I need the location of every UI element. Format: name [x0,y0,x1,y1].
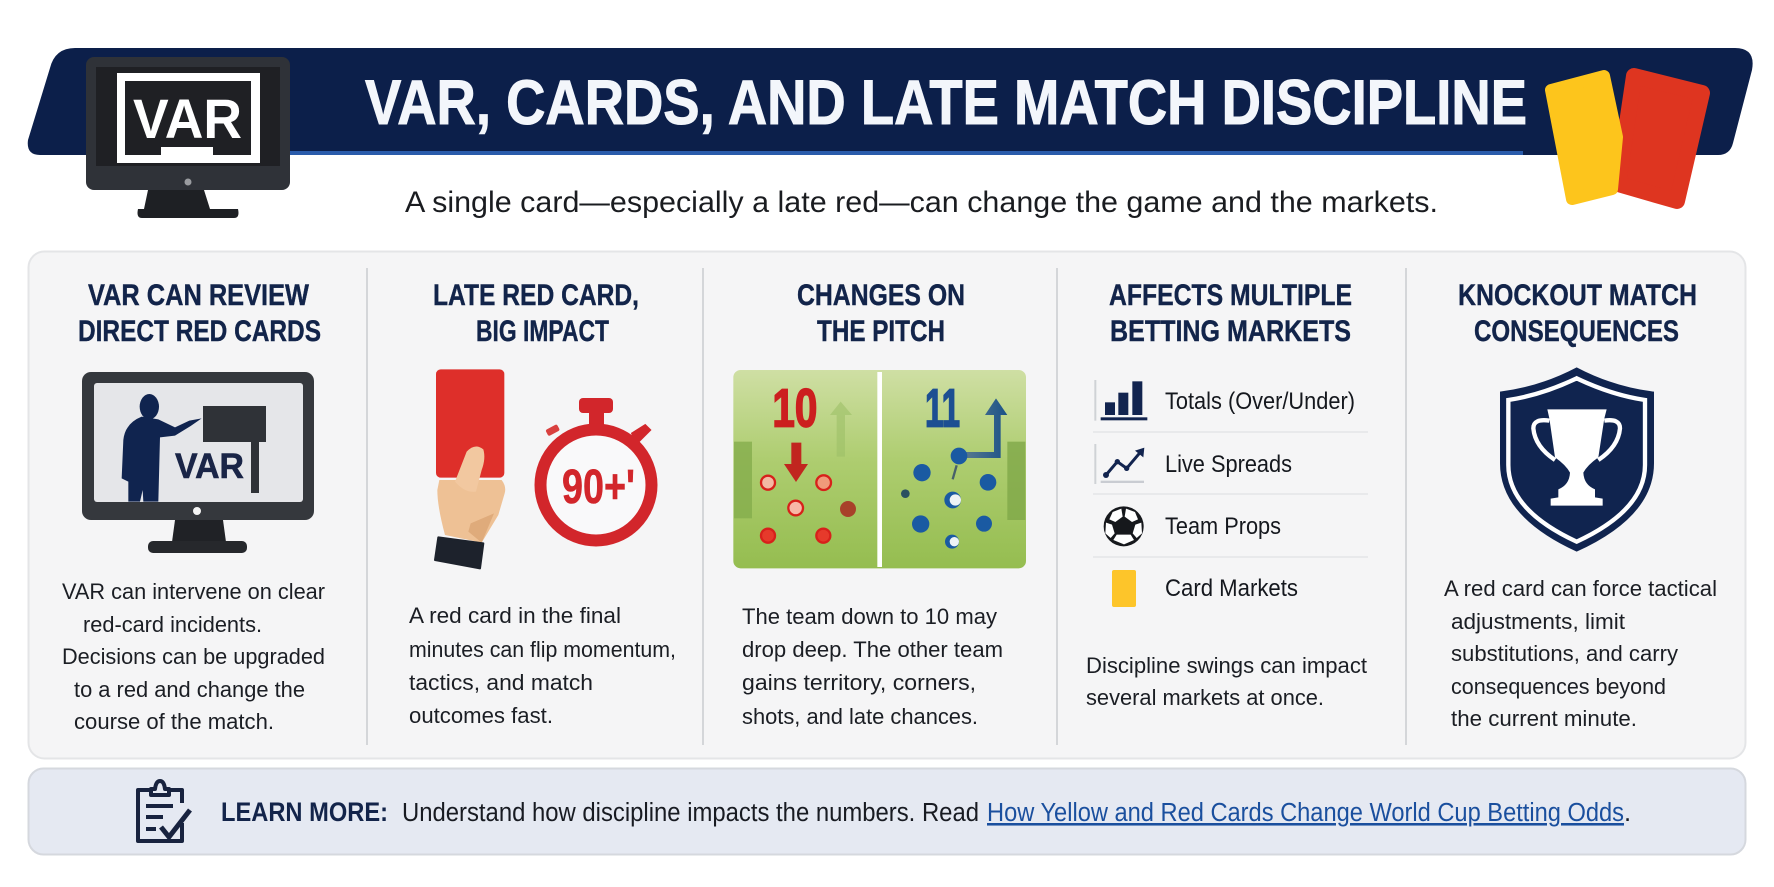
chart: pitch 10 vs 11 [733,370,1026,568]
text: pitch description: The team down to 10 may [742,604,998,629]
heading: late red card: BIG IMPACT [476,315,609,348]
title text: VAR, CARDS, AND LATE MATCH DISCIPLINE [365,68,1527,138]
title banner [28,48,1753,155]
heading: VAR can review [78,279,321,348]
text: knockout description: adjustments, limit [1451,609,1626,634]
item: team props: Team Props [1165,513,1281,540]
text: pitch description: shots, and late chances. [742,704,978,729]
text: late red description: outcomes fast. [409,703,553,728]
icon: yellow card [1112,570,1136,607]
heading: knockout consequences [1458,279,1697,348]
text: markets description: Discipline swings can impact [1086,653,1368,678]
item: card markets [1112,570,1298,607]
text: knockout description [1444,576,1717,731]
text: pitch description [742,604,1003,729]
icon: bar chart [1094,380,1147,421]
heading: changes on the pitch [797,279,965,348]
text: learn more: How Yellow and Red Cards Change World Cup Betting Odds [987,799,1624,827]
text: pitch description: gains territory, corners, [742,670,976,695]
panel: betting markets [1086,279,1368,710]
text: learn more: . [1624,799,1631,827]
chart: pitch 10 vs 11: 11 [925,380,960,439]
item: totals: Totals (Over/Under) [1165,388,1355,415]
heading: changes on the pitch: THE PITCH [817,315,945,348]
text: knockout description: the current minute. [1451,706,1637,731]
icon: stopwatch 90+: 90+' [562,461,635,514]
text: late red description: minutes can flip momentum, [409,637,676,662]
text: VAR description: VAR can intervene on clear [62,579,325,604]
text: knockout description: substitutions, and carry [1451,641,1679,666]
heading: VAR can review: DIRECT RED CARDS [78,315,321,348]
text: pitch description: drop deep. The other team [742,637,1003,662]
icon: monitor with referee [82,372,314,553]
heading: betting markets: BETTING MARKETS [1110,315,1351,348]
text: VAR description: Decisions can be upgraded [62,644,325,669]
icon: clipboard checklist [138,781,190,841]
text: markets description: several markets at once. [1086,685,1324,710]
heading: knockout consequences: KNOCKOUT MATCH [1458,279,1697,312]
icon: hand holding red card [435,369,505,568]
panel: VAR review [62,279,325,734]
text: learn more [221,797,1631,827]
text: knockout description: consequences beyond [1451,674,1666,699]
item: card markets: Card Markets [1165,575,1298,602]
heading: betting markets [1109,279,1352,348]
text: VAR description: to a red and change the [74,677,305,702]
icon: trend line [1094,444,1144,484]
text: VAR description: red-card incidents. [83,612,262,637]
text: VAR description [62,579,325,734]
icon: stopwatch 90+ [540,398,652,540]
panel: changes on the pitch [733,279,1026,729]
text: VAR description: course of the match. [74,709,274,734]
icon: shield with trophy [1500,367,1654,552]
panel: late red card [409,279,676,728]
heading: VAR can review: VAR CAN REVIEW [88,279,310,312]
heading: knockout consequences: CONSEQUENCES [1474,315,1679,348]
item: team props [1104,506,1281,546]
text: learn more: LEARN MORE: [221,797,388,827]
heading: late red card [433,279,639,348]
icon: VAR monitor: VAR [133,87,242,150]
heading: changes on the pitch: CHANGES ON [797,279,965,312]
icon: monitor with referee: VAR [175,447,244,486]
text: late red description: A red card in the final [409,603,621,628]
item: live spreads [1094,444,1292,484]
subtitle: A single card—especially a late red—can change the game and the markets. [405,186,1438,219]
chart: pitch 10 vs 11: 10 [772,380,817,439]
panel: knockout consequences [1444,279,1717,731]
text: markets description [1086,653,1368,710]
text: learn more: Understand how discipline impacts the numbers. Read [402,799,979,827]
icon: red and yellow cards [1551,76,1702,201]
text: late red description [409,603,676,728]
text: knockout description: A red card can force tactical [1444,576,1717,601]
main panel [28,252,1746,758]
item: totals [1094,380,1355,421]
learn more bar [28,768,1746,854]
item: live spreads: Live Spreads [1165,451,1292,478]
icon: soccer ball [1104,506,1144,546]
heading: betting markets: AFFECTS MULTIPLE [1109,279,1352,312]
heading: late red card: LATE RED CARD, [433,279,639,312]
text: late red description: tactics, and match [409,670,593,695]
icon: VAR monitor [86,57,290,218]
